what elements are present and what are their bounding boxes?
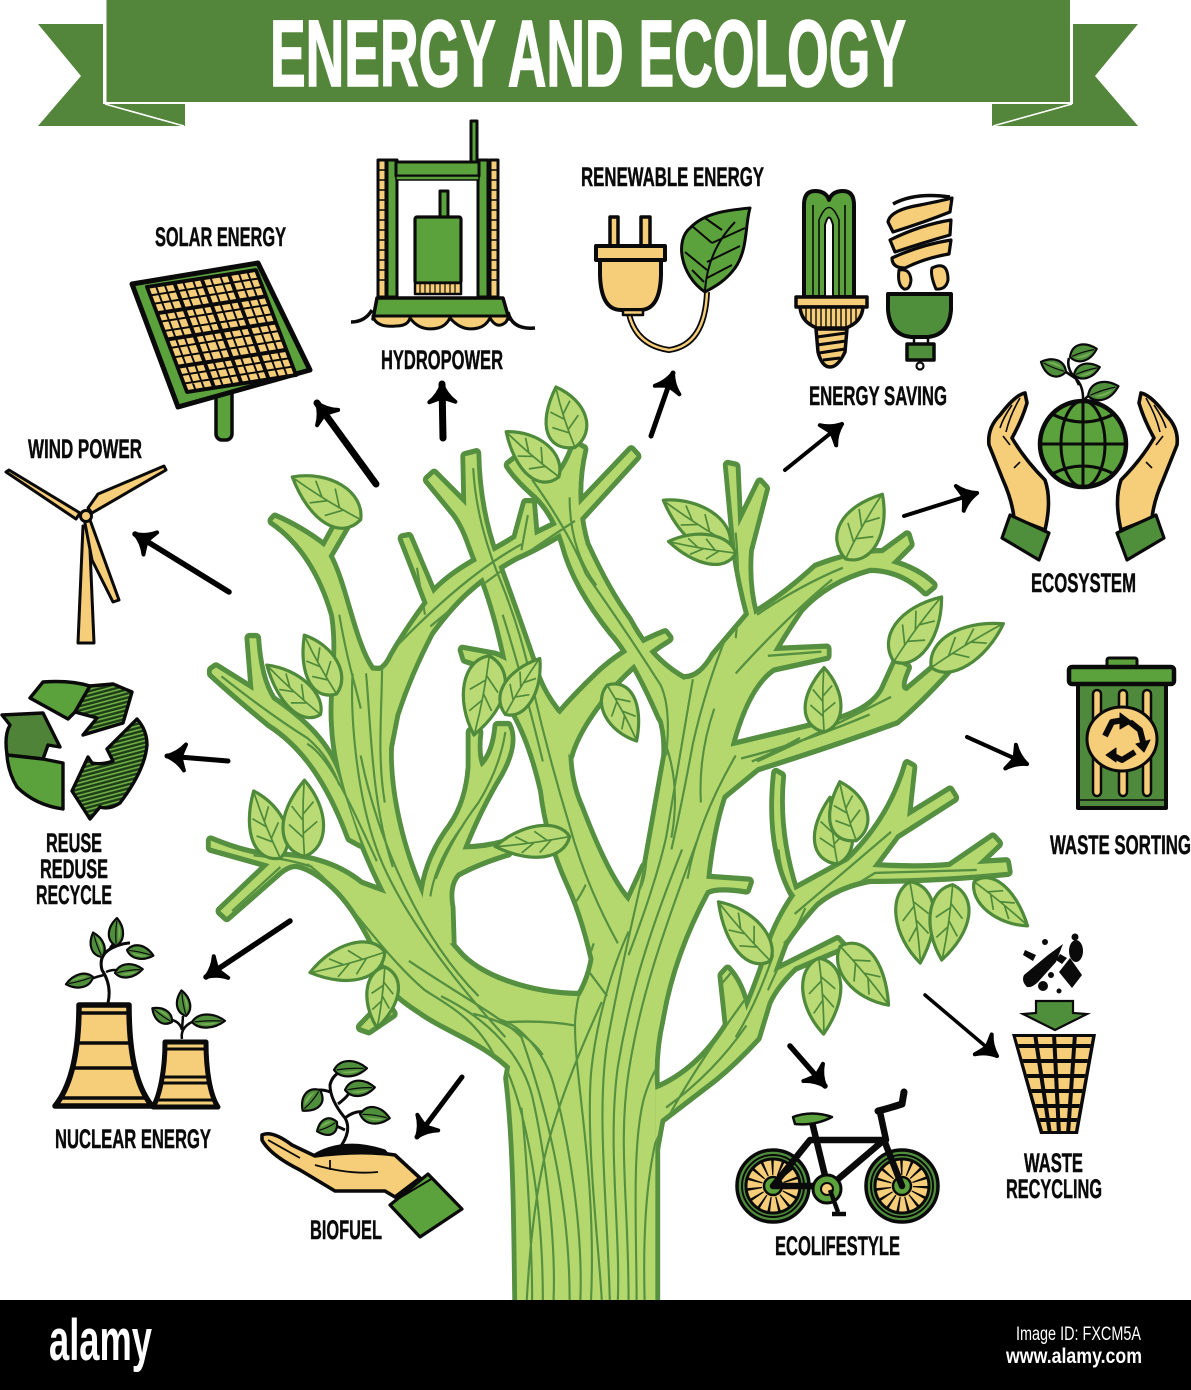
arrow to energy saving	[785, 424, 842, 470]
arrow to waste recycling	[925, 995, 997, 1056]
image id: Image ID: FXCM5A	[1016, 1324, 1141, 1345]
icon: solar panel	[132, 263, 310, 440]
banner ribbon	[38, 0, 1138, 126]
waste sorting item	[1050, 658, 1191, 860]
icon: spiral bulb	[888, 196, 952, 370]
arrow to biofuel	[417, 1077, 462, 1137]
icon: wind turbine	[6, 466, 166, 643]
arrow to ecosystem	[904, 493, 977, 516]
tree	[211, 380, 1037, 1300]
icon: recycling symbol	[2, 682, 147, 819]
icon: globe in hands	[989, 340, 1177, 560]
label: waste: WASTE	[1024, 1148, 1083, 1178]
footer bar	[0, 1300, 1191, 1390]
tree leaves	[236, 380, 1037, 1035]
icon: green down arrow	[1023, 1001, 1087, 1030]
ribbon main band	[106, 0, 1070, 102]
label: hydropower: HYDROPOWER	[381, 345, 503, 375]
label: renewable energy: RENEWABLE ENERGY	[581, 162, 764, 192]
icon: cooling towers with sprouts	[55, 918, 225, 1107]
arrow to ecolifestyle	[790, 1046, 825, 1086]
energy saving item	[796, 191, 952, 411]
icon: tube fluorescent bulb	[796, 191, 867, 367]
website: www.alamy.com	[1005, 1345, 1142, 1368]
arrows from tree to icons	[135, 373, 1027, 1137]
biofuel item	[262, 1060, 462, 1245]
ecolifestyle item	[737, 1092, 938, 1261]
icon: hydropower plant	[351, 121, 535, 329]
label: reuse: REUSE	[46, 828, 102, 858]
icon: plug with leaf	[596, 208, 750, 350]
icon: recycling bin	[1069, 658, 1174, 808]
label: nuclear energy: NUCLEAR ENERGY	[55, 1124, 211, 1154]
solar energy item	[132, 222, 310, 440]
icon: bicycle	[737, 1092, 938, 1222]
renewable energy item	[581, 162, 764, 350]
hydropower item	[351, 121, 535, 375]
ribbon left tail	[38, 24, 185, 126]
ribbon right tail	[992, 24, 1138, 126]
alamy logo: alamy	[49, 1308, 152, 1373]
arrow to recycle	[167, 756, 228, 761]
wind power item	[6, 434, 166, 643]
label: ecolifestyle: ECOLIFESTYLE	[775, 1231, 900, 1261]
waste recycling item	[1006, 934, 1102, 1198]
icon: falling debris	[1023, 934, 1083, 994]
icon: sprout on open hand	[262, 1060, 462, 1237]
label: biofuel: BIOFUEL	[310, 1215, 382, 1245]
nuclear energy item	[55, 918, 225, 1154]
arrow to hydropower	[442, 384, 443, 438]
arrow to nuclear energy	[206, 921, 290, 977]
label: recycling: RECYCLING	[1006, 1174, 1102, 1204]
reuse reduce recycle item	[2, 682, 147, 910]
label: solar energy: SOLAR ENERGY	[155, 222, 286, 252]
label: recycle: RECYCLE	[36, 880, 112, 910]
arrow to waste sorting	[967, 737, 1027, 764]
label: energy saving: ENERGY SAVING	[809, 381, 947, 411]
ecosystem item	[989, 340, 1177, 598]
label: wind power: WIND POWER	[28, 434, 142, 464]
arrow to solar energy	[317, 403, 376, 484]
arrow to renewable energy	[651, 373, 673, 436]
arrow to wind power	[135, 534, 229, 592]
icon: waste basket	[1012, 1034, 1096, 1134]
label: reduse: REDUSE	[40, 854, 108, 884]
